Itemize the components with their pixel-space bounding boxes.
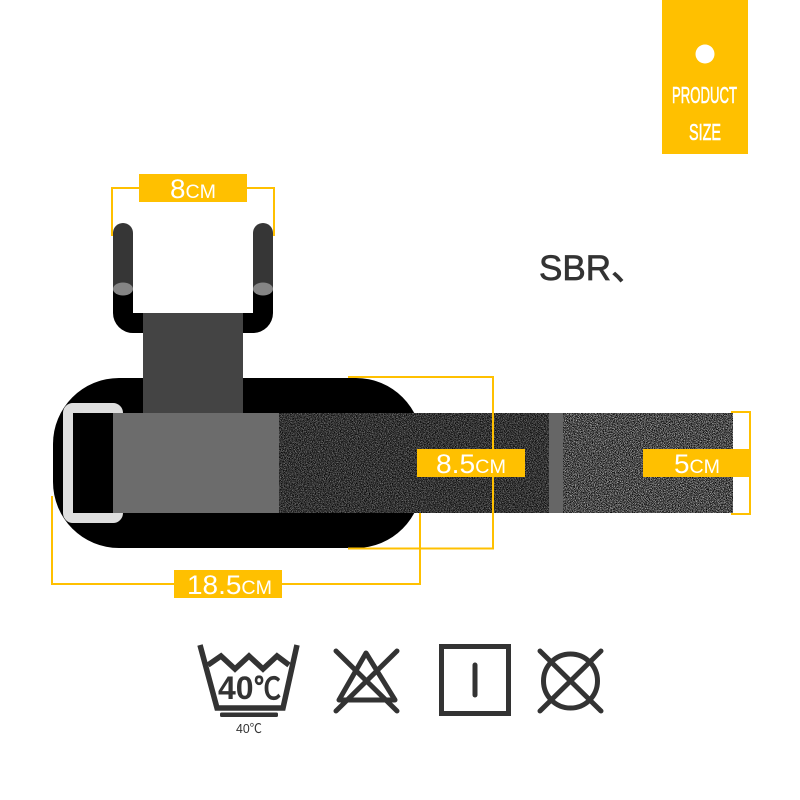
dimension: 8.5cm: 8.5CM bbox=[436, 449, 506, 479]
strap divider bbox=[549, 413, 563, 513]
light textured strap bbox=[563, 413, 733, 513]
buckle inner black bbox=[73, 413, 113, 513]
hook: right joint bbox=[253, 282, 273, 296]
icon: do not dry clean bbox=[540, 651, 601, 711]
icon: wash at 40 degrees: 40 bbox=[218, 670, 254, 706]
icon: do not bleach bbox=[336, 651, 397, 711]
tag text: size: SIZE bbox=[689, 119, 721, 145]
hook: left grey arm bbox=[113, 223, 133, 289]
dimension: 8cm bbox=[112, 174, 274, 236]
icon: tumble line dry bbox=[442, 646, 508, 714]
black body pad bbox=[53, 378, 422, 548]
material text: SBR、 bbox=[539, 249, 646, 288]
dimension: 5cm: 5CM bbox=[674, 449, 720, 479]
product size tag bbox=[662, 0, 748, 154]
hook: black U base bbox=[113, 289, 273, 333]
product illustration: wrist strap bbox=[53, 223, 733, 548]
hook: left joint bbox=[113, 282, 133, 296]
dimension: 5cm bbox=[643, 412, 751, 514]
dimension: 18.5cm: 18.5CM bbox=[187, 570, 272, 600]
hook: right grey arm bbox=[253, 223, 273, 289]
metal ring buckle bbox=[68, 408, 118, 518]
icon: wash at 40 degrees: 40℃ bbox=[236, 721, 262, 736]
dimension: 18.5cm bbox=[52, 496, 420, 600]
dimension: 8cm: 8CM bbox=[170, 174, 216, 204]
dimension: 8.5cm bbox=[348, 377, 525, 548]
dark textured strap bbox=[279, 413, 549, 513]
icon: wash at 40 degrees bbox=[200, 645, 297, 736]
icon: wash at 40 degrees: ℃ bbox=[254, 673, 281, 706]
upper strap bbox=[143, 313, 243, 413]
grey strap section bbox=[113, 413, 279, 513]
tag dot bbox=[696, 44, 714, 64]
tag text: product: PRODUCT bbox=[672, 82, 737, 108]
